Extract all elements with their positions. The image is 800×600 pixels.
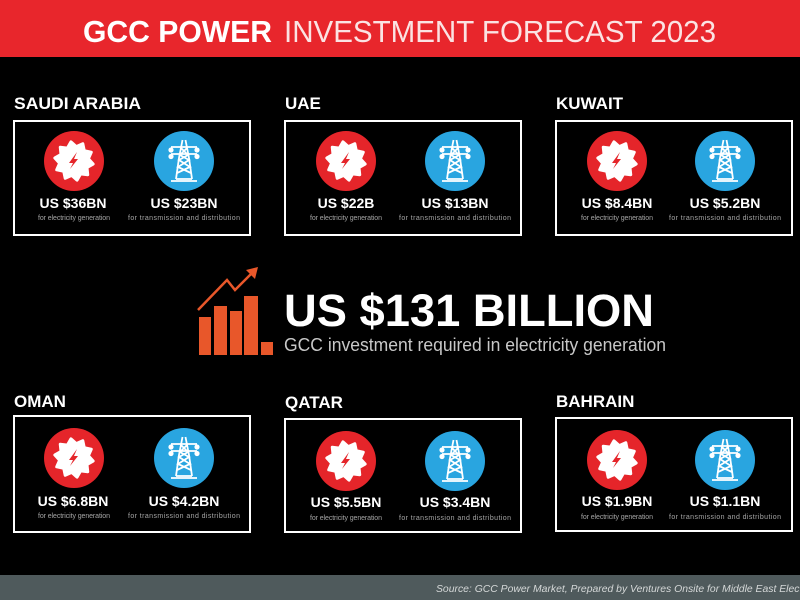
panel: Saudi Arabia: US $23BN [151,195,217,211]
panel: Kuwait: for transmission and distribution [669,215,781,222]
panel: Bahrain: US $1.1BN [690,493,760,509]
panel: UAE [285,94,521,235]
panel: Kuwait [556,94,792,235]
panel: Oman: US $6.8BN [38,493,108,509]
panel: Saudi Arabia: SAUDI ARABIA [14,94,141,113]
panel: Oman: for electricity generation [38,513,110,520]
panel: Qatar [285,393,521,532]
panel: Qatar: US $3.4BN [420,494,490,510]
title banner: INVESTMENT FORECAST 2023 [284,14,716,49]
headline figure: US $131 BILLION [284,285,654,336]
source footer [0,575,800,600]
panel: Saudi Arabia [14,94,250,235]
panel: UAE: US $13BN [422,195,488,211]
panel: Qatar: US $5.5BN [311,494,381,510]
panel: Kuwait: US $5.2BN [690,195,760,211]
panel: Saudi Arabia: for electricity generation [38,215,110,222]
panel: Qatar: for transmission and distribution [399,515,511,522]
headline caption: GCC investment required in electricity generation [284,335,666,355]
panel: Qatar: QATAR [285,393,343,412]
title banner [0,0,800,57]
icon: growth chart [198,267,273,355]
panel: UAE: for electricity generation [310,215,382,222]
panel: Saudi Arabia: US $36BN [40,195,106,211]
panel: Kuwait: US $8.4BN [582,195,652,211]
panel: UAE: for transmission and distribution [399,215,511,222]
panel: UAE: UAE [285,94,321,113]
panel: Kuwait: KUWAIT [556,94,624,113]
panel: Oman: for transmission and distribution [128,513,240,520]
panel: Bahrain: for transmission and distribution [669,514,781,521]
panel: Oman: OMAN [14,392,66,411]
panel: Qatar: for electricity generation [310,515,382,522]
panel: Oman: US $4.2BN [149,493,219,509]
panel: Kuwait: for electricity generation [581,215,653,222]
title banner: GCC POWER [83,14,272,49]
panel: Bahrain: US $1.9BN [582,493,652,509]
panel: Oman [14,392,250,532]
panel: Saudi Arabia: for transmission and distribution [128,215,240,222]
panel: Bahrain: BAHRAIN [556,392,634,411]
panel: UAE: US $22B [318,195,374,211]
panel: Bahrain: for electricity generation [581,514,653,521]
panel: Bahrain [556,392,792,531]
